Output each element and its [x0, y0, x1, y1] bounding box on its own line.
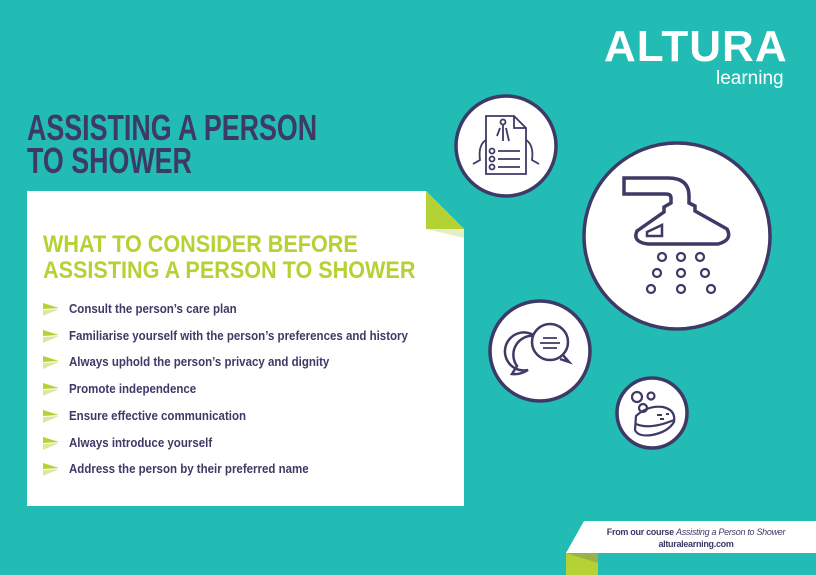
bullet list: Promote independence	[69, 382, 196, 396]
logo: ALTURA	[604, 22, 788, 71]
subheading: ASSISTING A PERSON TO SHOWER	[43, 257, 415, 284]
footer text: From our course Assisting a Person to Shower	[607, 527, 785, 537]
subheading: WHAT TO CONSIDER BEFORE	[43, 231, 358, 258]
bullet list: Consult the person’s care plan	[69, 302, 237, 316]
footer banner	[566, 521, 816, 575]
title: TO SHOWER	[27, 140, 192, 181]
bullet list: Always uphold the person’s privacy and dignity	[69, 355, 329, 369]
footer text: alturalearning.com	[658, 539, 734, 549]
icon: care plan document	[456, 96, 556, 196]
panel: considerations	[27, 191, 464, 506]
footer text	[607, 527, 786, 549]
title: ASSISTING A PERSON	[27, 107, 317, 148]
bullet list	[43, 302, 408, 476]
subheading	[43, 231, 415, 284]
icon: speech bubbles	[490, 301, 590, 401]
bullet list: Always introduce yourself	[69, 436, 212, 450]
icon: soap	[617, 378, 687, 448]
bullet list: Familiarise yourself with the person’s preferences and history	[69, 329, 408, 343]
icon: shower head	[584, 143, 770, 329]
bullet list: Ensure effective communication	[69, 409, 246, 423]
logo: learning	[716, 68, 784, 89]
bullet list: Address the person by their preferred name	[69, 462, 309, 476]
title	[27, 107, 317, 181]
